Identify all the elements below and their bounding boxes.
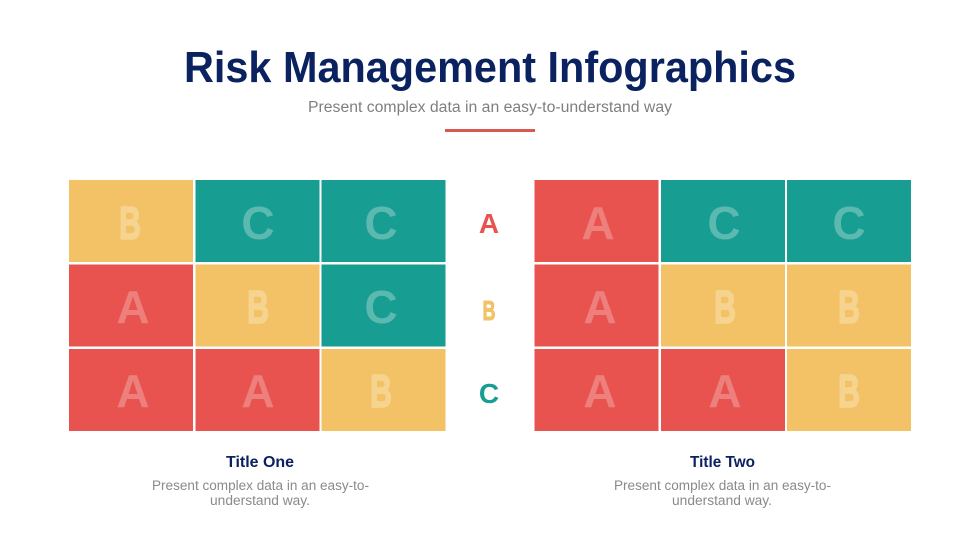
text block: title two: understand way. [672,493,772,508]
panel: left risk matrix: A [116,365,150,417]
panel: right risk matrix: B [714,281,736,333]
panel: right risk matrix: A [708,365,742,417]
panel: right risk matrix: C [707,197,741,249]
text block: title one: Title One [226,454,294,471]
panel: left risk matrix: B [247,281,269,333]
panel: left risk matrix: C [364,197,398,249]
title underline [445,129,535,132]
text block: title two: Title Two [690,454,755,471]
text block: title one [152,454,369,508]
panel: right risk matrix: A [583,281,617,333]
panel: left risk matrix: C [241,197,275,249]
panel: left risk matrix: A [241,365,275,417]
subtitle: Present complex data in an easy-to-understand way [308,99,672,116]
panel: left risk matrix [69,180,446,431]
panel: left risk matrix: C [364,281,398,333]
legend: risk levels: B [482,295,496,326]
legend: risk levels: A [479,208,499,239]
panel: right risk matrix: C [832,197,866,249]
text block: title two [614,454,831,508]
panel: right risk matrix: A [583,365,617,417]
text block: title two: Present complex data in an easy-to- [614,478,831,493]
legend: risk levels [479,208,499,409]
text block: title one: understand way. [210,493,310,508]
panel: right risk matrix [534,180,911,431]
panel: right risk matrix: B [838,281,860,333]
panel: left risk matrix: B [370,365,392,417]
text block: title one: Present complex data in an easy-to- [152,478,369,493]
panel: left risk matrix: A [116,281,150,333]
panel: right risk matrix: B [838,365,860,417]
legend: risk levels: C [479,378,499,409]
panel: right risk matrix: A [581,197,615,249]
panel: left risk matrix: B [119,197,141,249]
title: Risk Management Infographics [184,43,796,92]
